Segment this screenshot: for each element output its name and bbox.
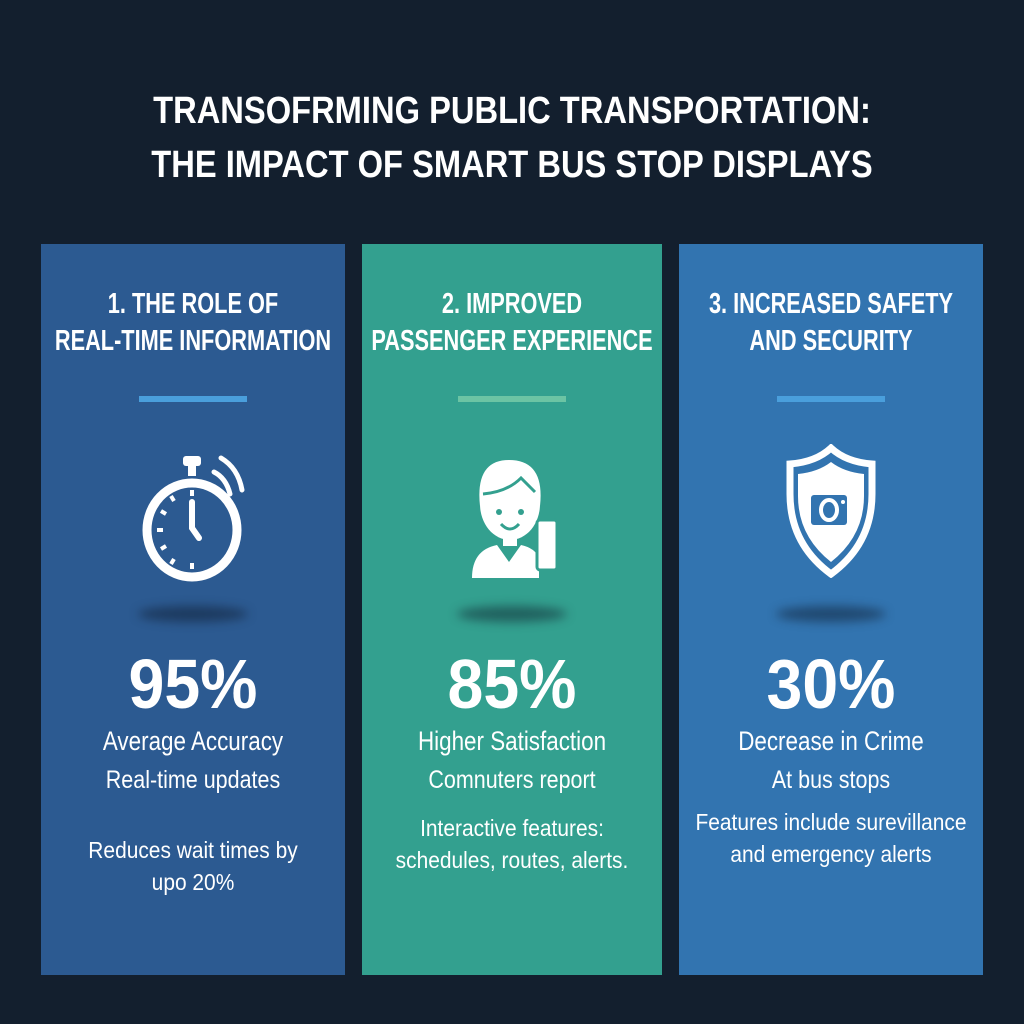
icon: shield camera	[786, 444, 876, 578]
stat 85%: 85%	[448, 645, 576, 723]
heading 3	[709, 288, 953, 357]
panel: safety and security	[679, 244, 983, 975]
panel: real-time information: Average Accuracy	[103, 726, 283, 756]
heading 1	[55, 288, 331, 357]
icon: person with phone	[472, 460, 556, 578]
heading 1: REAL-TIME INFORMATION	[55, 325, 331, 357]
panel: passenger experience: Comnuters report	[428, 766, 596, 794]
note 2	[396, 815, 628, 873]
heading 3: 3. INCREASED SAFETY	[709, 288, 953, 320]
stat 30%: 30%	[767, 645, 895, 723]
panel: passenger experience: Higher Satisfaction	[418, 726, 606, 756]
icon: stopwatch	[142, 456, 244, 582]
panel: safety and security: Decrease in Crime	[738, 726, 924, 756]
heading 2: PASSENGER EXPERIENCE	[371, 325, 653, 357]
note 3: Features include surevillance	[695, 809, 967, 835]
stat 95%: 95%	[129, 645, 257, 723]
title	[151, 90, 873, 186]
note 1: Reduces wait times by	[88, 837, 298, 863]
heading 3: AND SECURITY	[749, 325, 913, 357]
panel: passenger experience	[362, 244, 662, 975]
note 2: schedules, routes, alerts.	[396, 847, 628, 873]
panel: safety and security: At bus stops	[772, 766, 890, 794]
panel: real-time information	[41, 244, 345, 975]
note 3: and emergency alerts	[730, 841, 932, 867]
note 2: Interactive features:	[420, 815, 604, 841]
heading 2: 2. IMPROVED	[442, 288, 582, 320]
panel: real-time information: Real-time updates	[106, 766, 280, 794]
title: TRANSOFRMING PUBLIC TRANSPORTATION:	[153, 90, 871, 132]
note 1	[88, 837, 298, 895]
note 3	[695, 809, 967, 867]
title: THE IMPACT OF SMART BUS STOP DISPLAYS	[151, 144, 873, 186]
note 1: upo 20%	[152, 869, 234, 895]
heading 2	[371, 288, 653, 357]
heading 1: 1. THE ROLE OF	[108, 288, 278, 320]
